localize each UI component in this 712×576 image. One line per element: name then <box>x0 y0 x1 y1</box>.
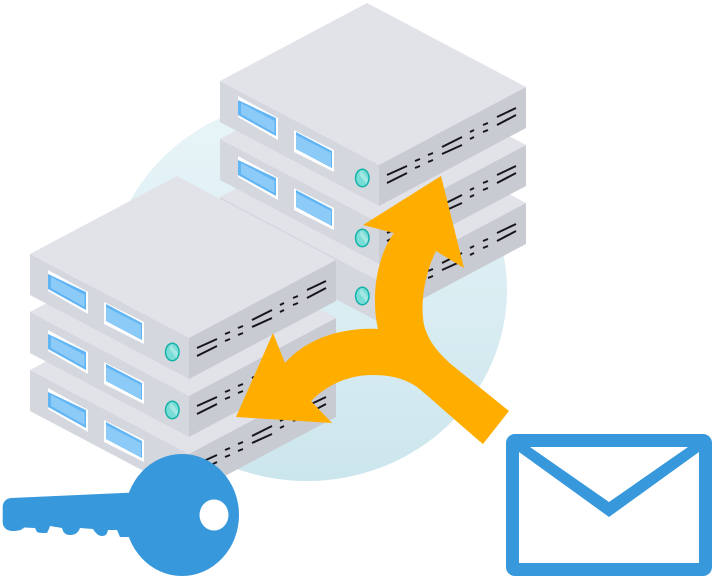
icon: envelope <box>506 434 712 576</box>
lower server stack <box>30 176 336 495</box>
icon: key <box>3 454 239 576</box>
background circle <box>107 99 507 481</box>
upper server stack <box>220 3 526 322</box>
arrow: forked orange arrow <box>236 176 509 444</box>
